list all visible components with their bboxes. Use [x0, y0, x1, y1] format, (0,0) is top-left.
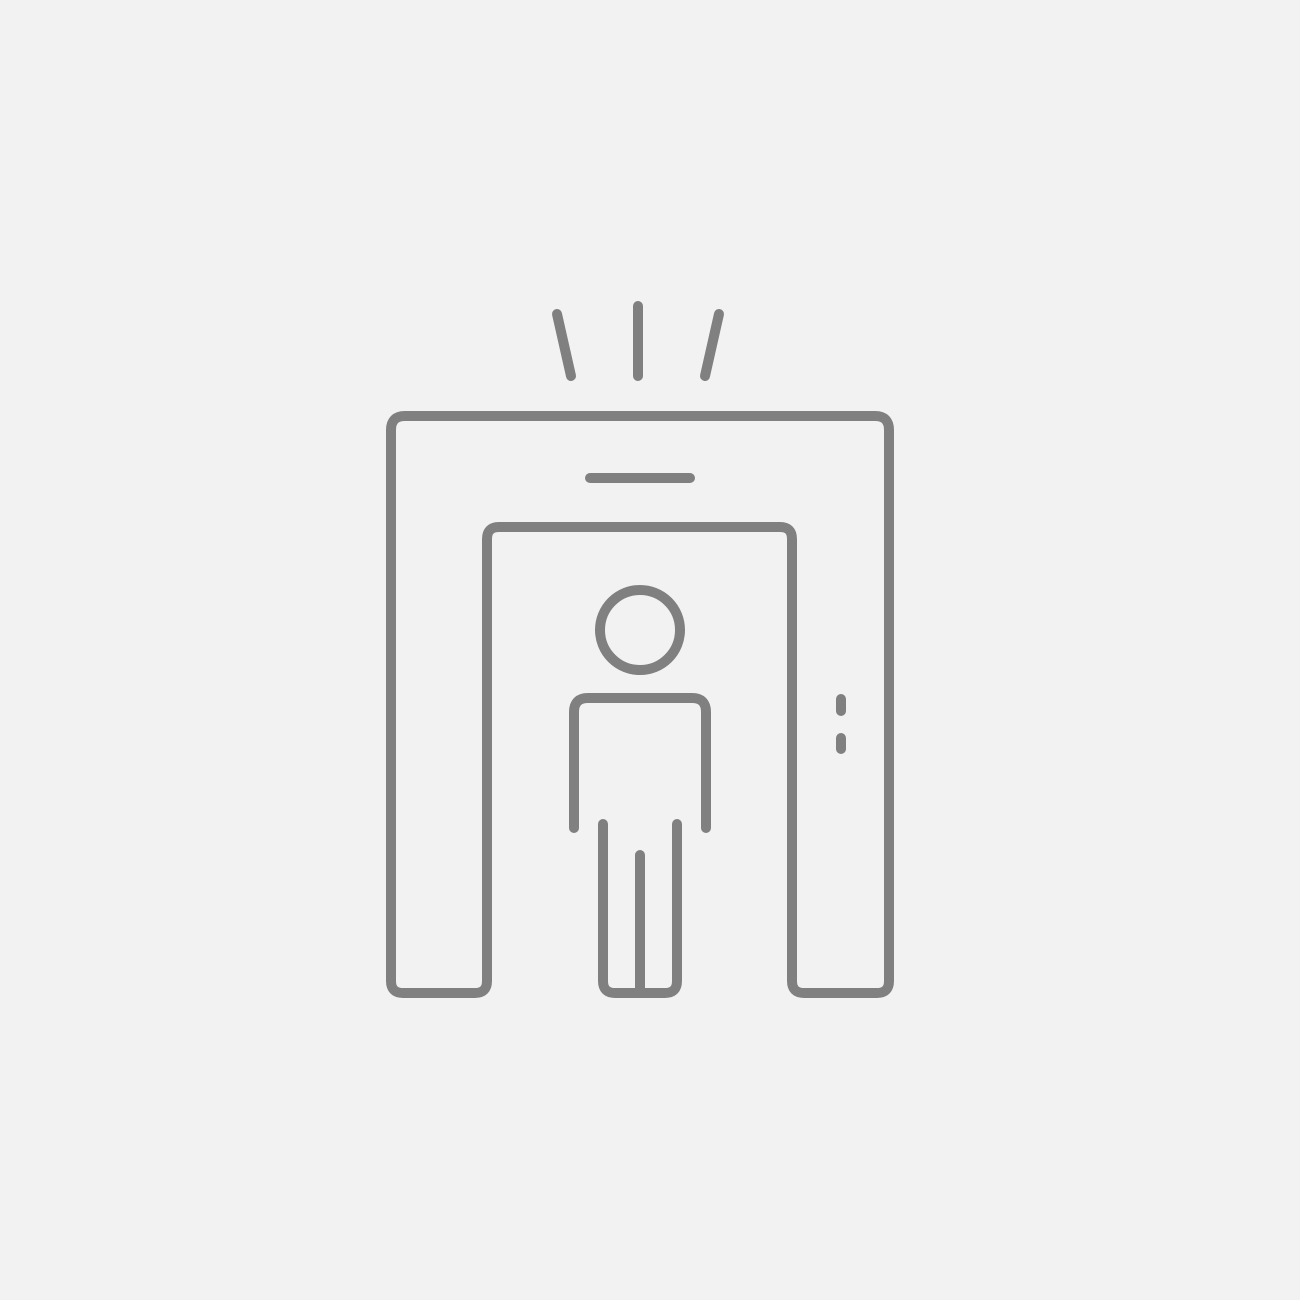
icon: alarm rays — [557, 306, 719, 376]
icon: gate frame — [391, 416, 889, 993]
icon: person — [574, 590, 706, 993]
